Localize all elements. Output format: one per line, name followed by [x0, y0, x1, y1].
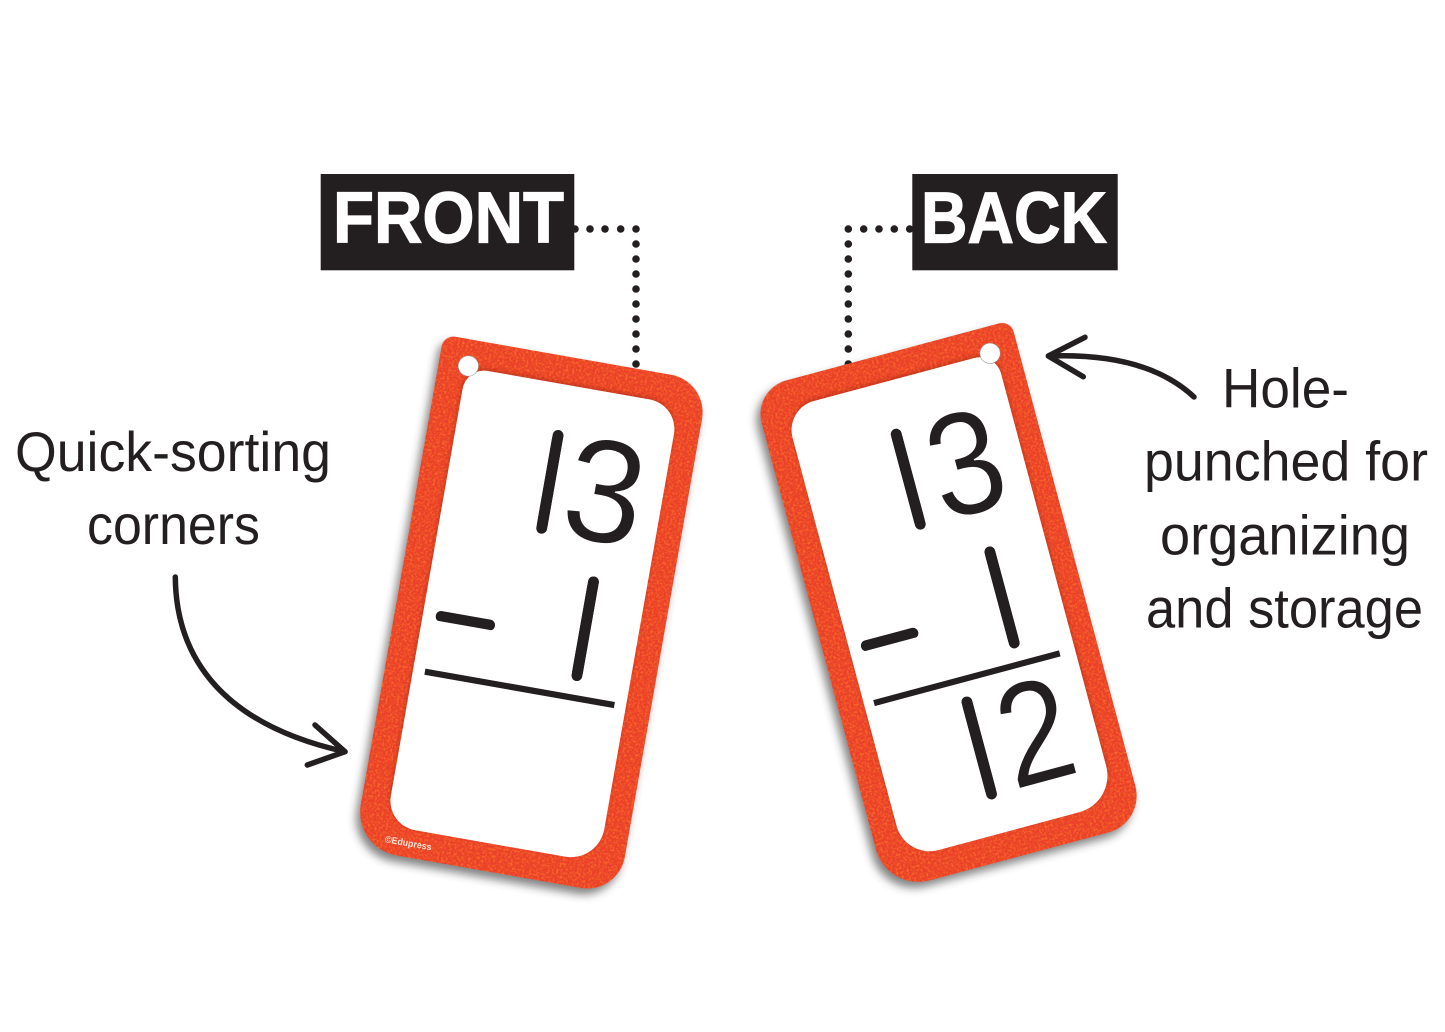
- dotted connector: back: [844, 225, 914, 368]
- card: front: −: [419, 546, 513, 692]
- callout text: hole-punched: [1144, 357, 1428, 639]
- callout text: hole-punched: Hole-: [1222, 357, 1349, 420]
- card: back: 3: [909, 374, 1022, 552]
- card: front: 3: [552, 404, 658, 579]
- card: back: [749, 320, 1145, 898]
- card: back: 1: [935, 503, 1063, 693]
- dotted connector: front: [571, 225, 640, 368]
- card: back: 1: [841, 385, 969, 574]
- arrow: to quick-sorting corner: [175, 577, 345, 765]
- callout text: hole-punched: punched for: [1144, 430, 1428, 493]
- card: front: 1: [525, 536, 640, 721]
- label: BACK: BACK: [921, 177, 1107, 258]
- callout text: quick-sorting corners: [15, 420, 331, 556]
- callout text: quick-sorting corners: Quick-sorting: [15, 420, 331, 483]
- card: back: −: [838, 563, 942, 712]
- card: front: [349, 335, 709, 900]
- label: FRONT: FRONT: [333, 177, 564, 258]
- callout text: hole-punched: and storage: [1146, 576, 1423, 639]
- card: front: ©Edupress: [384, 834, 432, 853]
- card: back: 1: [913, 654, 1041, 844]
- card: front: 1: [490, 389, 605, 574]
- callout text: quick-sorting corners: corners: [87, 493, 260, 556]
- card: back: 2: [979, 644, 1091, 821]
- arrow: to punched hole: [1048, 337, 1194, 397]
- callout text: hole-punched: organizing: [1160, 503, 1410, 566]
